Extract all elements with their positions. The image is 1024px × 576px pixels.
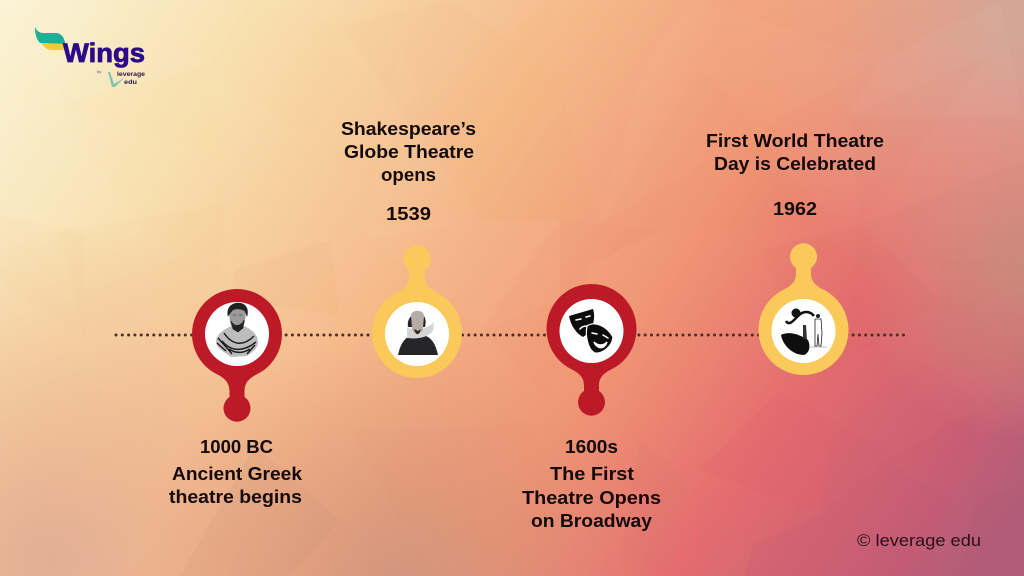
yellow pin ring — [758, 285, 848, 375]
white disc — [772, 299, 836, 363]
text: Shakespeare's Globe Theatre opens — [341, 118, 476, 185]
milestone 1600s pin — [546, 284, 636, 416]
logo leverage text: leverage — [117, 71, 145, 78]
text: The First Theatre Opens on Broadway — [522, 463, 661, 531]
copyright credit: © leverage edu — [857, 531, 981, 550]
text: First World Theatre Day is Celebrated: Day is Celebrated — [714, 153, 876, 174]
milestone 1962 pin — [758, 243, 848, 375]
icon: theatre masks — [569, 309, 613, 353]
text: The First Theatre Opens on Broadway: The First — [550, 463, 634, 484]
red pin ring — [546, 284, 636, 374]
icon: stage performers — [781, 308, 827, 355]
logo edu text: edu — [124, 79, 137, 86]
logo V mark — [108, 72, 124, 87]
yellow pin neck and ball — [391, 245, 443, 297]
icon: Greek bust — [216, 303, 258, 357]
yellow pin neck and ball — [778, 243, 830, 294]
text: Ancient Greek theatre begins — [169, 463, 303, 507]
text: The First Theatre Opens on Broadway: on Broadway — [531, 510, 653, 531]
dotted timeline — [116, 334, 906, 336]
date: 1539: 1539 — [386, 203, 431, 224]
date: 1962: 1962 — [773, 198, 817, 219]
text: The First Theatre Opens on Broadway: Theatre Opens — [522, 487, 661, 508]
logo byline: by — [97, 69, 101, 74]
white disc — [205, 302, 269, 366]
logo wave: yellow — [41, 43, 64, 50]
text: Shakespeare's Globe Theatre opens: Shakespeare’s — [341, 118, 476, 139]
logo: Wings by leverage edu — [35, 27, 145, 87]
text: First World Theatre Day is Celebrated — [706, 130, 884, 174]
red pin neck and ball — [211, 370, 263, 422]
icon: Shakespeare portrait — [398, 311, 438, 355]
text: Shakespeare's Globe Theatre opens: opens — [381, 164, 436, 185]
text: Shakespeare's Globe Theatre opens: Globe Theatre — [344, 141, 474, 162]
red pin ring — [192, 289, 282, 379]
logo wordmark: Wings — [63, 38, 145, 68]
text: First World Theatre Day is Celebrated: First World Theatre — [706, 130, 884, 151]
date: 1000 BC: 1000 BC — [200, 436, 273, 457]
logo wave: teal — [35, 27, 65, 44]
yellow pin ring — [372, 288, 462, 378]
text: Ancient Greek theatre begins: Ancient Greek — [172, 463, 303, 484]
text: Ancient Greek theatre begins: theatre begins — [169, 486, 302, 507]
red pin neck and ball — [566, 365, 618, 416]
white disc — [385, 302, 449, 366]
milestone 1539 pin — [372, 245, 462, 378]
date: 1600s: 1600s — [565, 436, 618, 457]
white disc — [560, 299, 624, 363]
milestone 1000 BC pin — [192, 289, 282, 422]
